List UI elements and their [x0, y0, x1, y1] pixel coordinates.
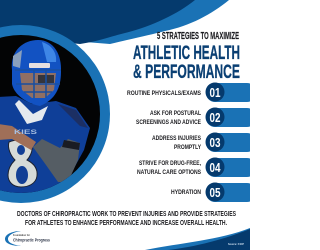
- strategy 3: ADDRESS INJURIES: [152, 135, 201, 142]
- strategy 3: 03: [210, 135, 220, 150]
- bottom swoosh: [145, 228, 250, 250]
- strategy 1: ROUTINE PHYSICALS/EXAMS: [127, 90, 201, 97]
- strategy 5: HYDRATION: [171, 189, 201, 196]
- logo: Foundation for Chiropractic Progress: Foundation for: [13, 233, 31, 237]
- strategy 1: 01: [210, 85, 220, 100]
- strategy 4: STRIVE FOR DRUG-FREE,: [139, 160, 201, 167]
- photo circle: football player: [0, 25, 110, 220]
- closing statement: [17, 211, 236, 227]
- logo: Foundation for Chiropractic Progress: Chiropractic Progress: [13, 238, 50, 244]
- face: [20, 73, 56, 98]
- strategy 1: [127, 82, 256, 102]
- strategy 5: [171, 182, 256, 202]
- strategy 3: [152, 132, 256, 152]
- logo: Foundation for Chiropractic Progress: [5, 231, 50, 246]
- strategy 2: [136, 108, 256, 127]
- arm sleeve: [33, 139, 80, 182]
- strategy 4: NATURAL CARE OPTIONS: [137, 169, 201, 176]
- strategy 5: 05: [210, 185, 220, 200]
- number 8: [8, 140, 37, 187]
- jersey: [0, 96, 90, 193]
- hand: [0, 124, 36, 150]
- strategy 4: [137, 158, 256, 177]
- strategy 2: 02: [210, 110, 220, 125]
- strategy 3: PROMPTLY: [174, 144, 201, 151]
- strategy 4: 04: [210, 160, 221, 175]
- title: [133, 42, 240, 83]
- top swoosh: [0, 0, 229, 44]
- strategy 2: SCREENINGS AND ADVICE: [136, 119, 201, 126]
- source note: Source: F4CP: [228, 242, 244, 246]
- jersey lettering: KIES: [14, 129, 38, 136]
- helmet: [12, 40, 61, 106]
- strategy 2: ASK FOR POSTURAL: [150, 110, 201, 117]
